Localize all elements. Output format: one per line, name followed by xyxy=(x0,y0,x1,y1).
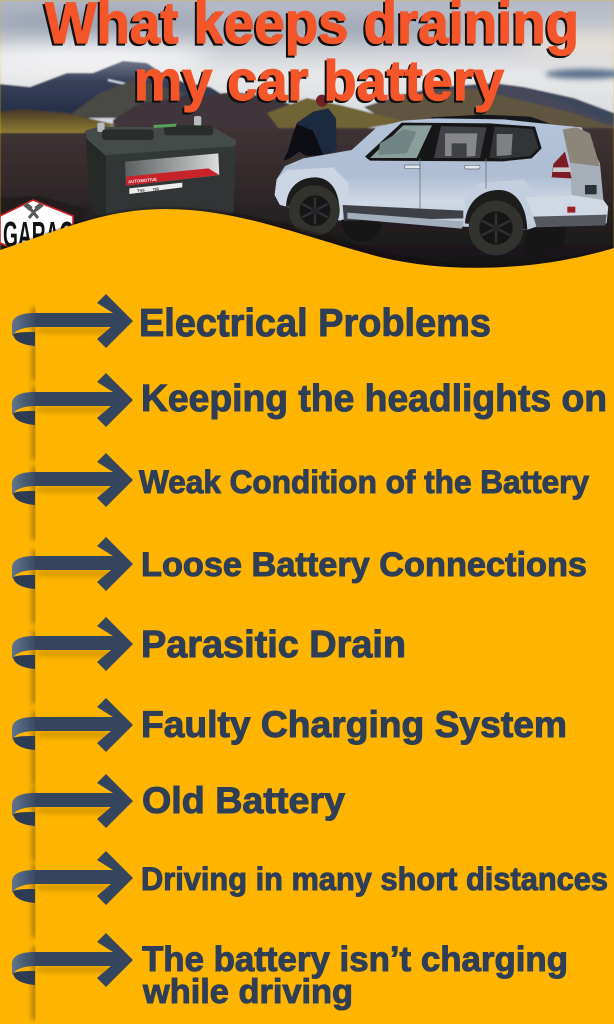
door handles xyxy=(405,165,480,169)
arrow xyxy=(12,294,133,381)
car illustration xyxy=(275,115,608,255)
window frame xyxy=(365,123,542,161)
header photo background xyxy=(0,0,614,268)
battery label: AUTOMOTIVE xyxy=(128,177,157,184)
logo: GARAGE badge: GARAGE xyxy=(3,214,87,255)
list item: Parasitic Drain xyxy=(12,617,406,704)
battery label: T-65 750 xyxy=(137,187,159,193)
logo: GARAGE badge xyxy=(0,200,87,255)
arrow xyxy=(12,698,133,785)
roof rack xyxy=(430,115,550,123)
windows xyxy=(370,125,539,159)
list item: Weak Condition of the Battery xyxy=(12,453,589,540)
front fender xyxy=(275,167,349,220)
list item: Driving in many short distances xyxy=(12,851,608,938)
list item: Faulty Charging System xyxy=(12,698,567,785)
lower trim xyxy=(343,205,463,221)
list item: Keeping the headlights on xyxy=(12,373,607,460)
arrow xyxy=(12,537,133,624)
arrow xyxy=(12,774,133,861)
terminals xyxy=(97,116,201,132)
arrow xyxy=(12,373,133,460)
list item: Loose Battery Connections xyxy=(12,537,587,624)
list item: Faulty Charging System: Faulty Charging System xyxy=(141,704,567,745)
icon: crossed pistons xyxy=(25,204,42,218)
battery illustration xyxy=(85,116,236,220)
list item: Weak Condition of the Battery: Weak Condition of the Battery xyxy=(139,464,589,500)
list item: The battery isn't charging while driving xyxy=(12,933,568,1020)
list item: The battery isn't charging while driving: while driving xyxy=(142,973,353,1011)
list item: Driving in many short distances: Driving in many short distances xyxy=(141,861,608,897)
wheel arches xyxy=(286,177,527,230)
list item: Keeping the headlights on: Keeping the headlights on xyxy=(141,378,607,420)
battery label xyxy=(125,153,219,194)
list item: Loose Battery Connections: Loose Battery Connections xyxy=(141,546,587,584)
far wheels xyxy=(342,202,567,255)
list item: Electrical Problems xyxy=(12,294,491,381)
arrow xyxy=(12,933,133,1020)
car body xyxy=(275,118,608,230)
arrow xyxy=(12,617,133,704)
arrow xyxy=(12,453,133,540)
list item: Electrical Problems: Electrical Problems xyxy=(139,302,491,345)
tailgate xyxy=(570,163,603,200)
title: my car battery xyxy=(132,51,502,115)
list item: The battery isn't charging while driving: The battery isn’t charging xyxy=(142,940,568,979)
list item: Parasitic Drain: Parasitic Drain xyxy=(141,624,406,666)
person sitting on hood xyxy=(283,95,337,161)
list item: Old Battery: Old Battery xyxy=(142,780,345,821)
rear fender and bumper xyxy=(465,179,537,230)
title: my car battery xyxy=(134,49,504,113)
list item: Old Battery xyxy=(12,774,345,861)
title xyxy=(43,0,579,115)
rear wheel xyxy=(469,201,523,255)
arrow xyxy=(12,851,133,938)
front wheel xyxy=(289,185,340,236)
tail light xyxy=(552,152,572,178)
yellow wavy panel xyxy=(0,208,614,1024)
battery caps xyxy=(102,125,213,140)
